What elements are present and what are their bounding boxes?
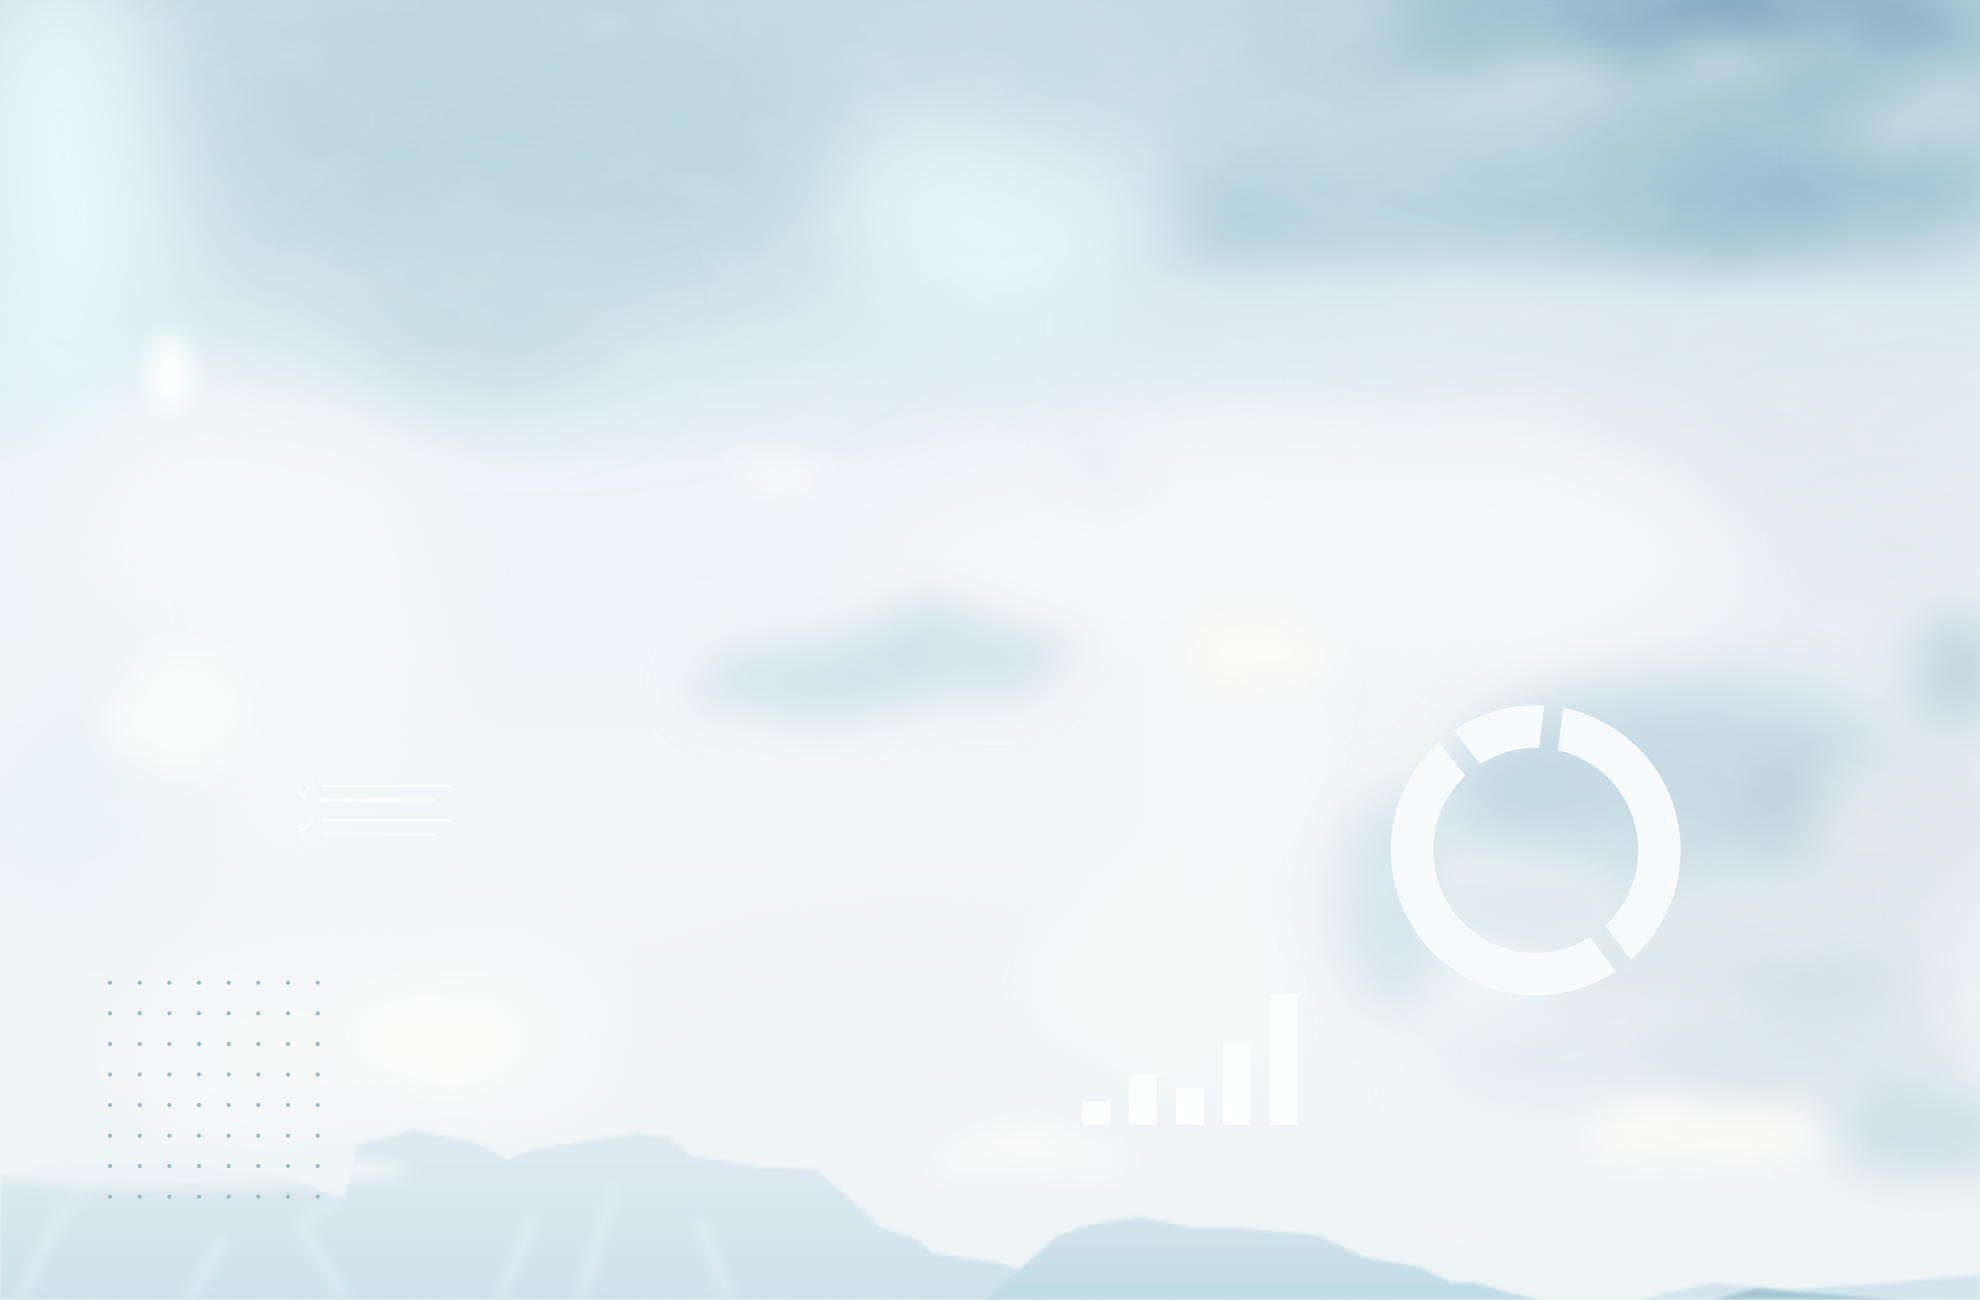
check item 2 — [298, 816, 452, 836]
check item 1 — [298, 781, 452, 802]
donut segment: top small — [1454, 705, 1544, 764]
bar 2 — [1129, 1074, 1157, 1125]
dot grid pattern — [108, 981, 320, 1199]
bar 4 — [1222, 1044, 1250, 1125]
bar chart — [1082, 994, 1298, 1125]
background: mountain range, left — [0, 1130, 1040, 1300]
checklist icon — [298, 781, 452, 836]
bar 5 — [1270, 994, 1298, 1125]
bar 1 — [1082, 1102, 1110, 1125]
bright patch near the left edge — [150, 337, 190, 413]
donut segment: right — [1558, 708, 1681, 960]
donut chart — [1391, 705, 1681, 995]
background: distant ridge, right — [1637, 1275, 1980, 1300]
donut segment: left and bottom — [1391, 742, 1616, 995]
background: mountain peak, centre-right — [985, 1217, 1541, 1300]
bar 3 — [1176, 1088, 1204, 1125]
